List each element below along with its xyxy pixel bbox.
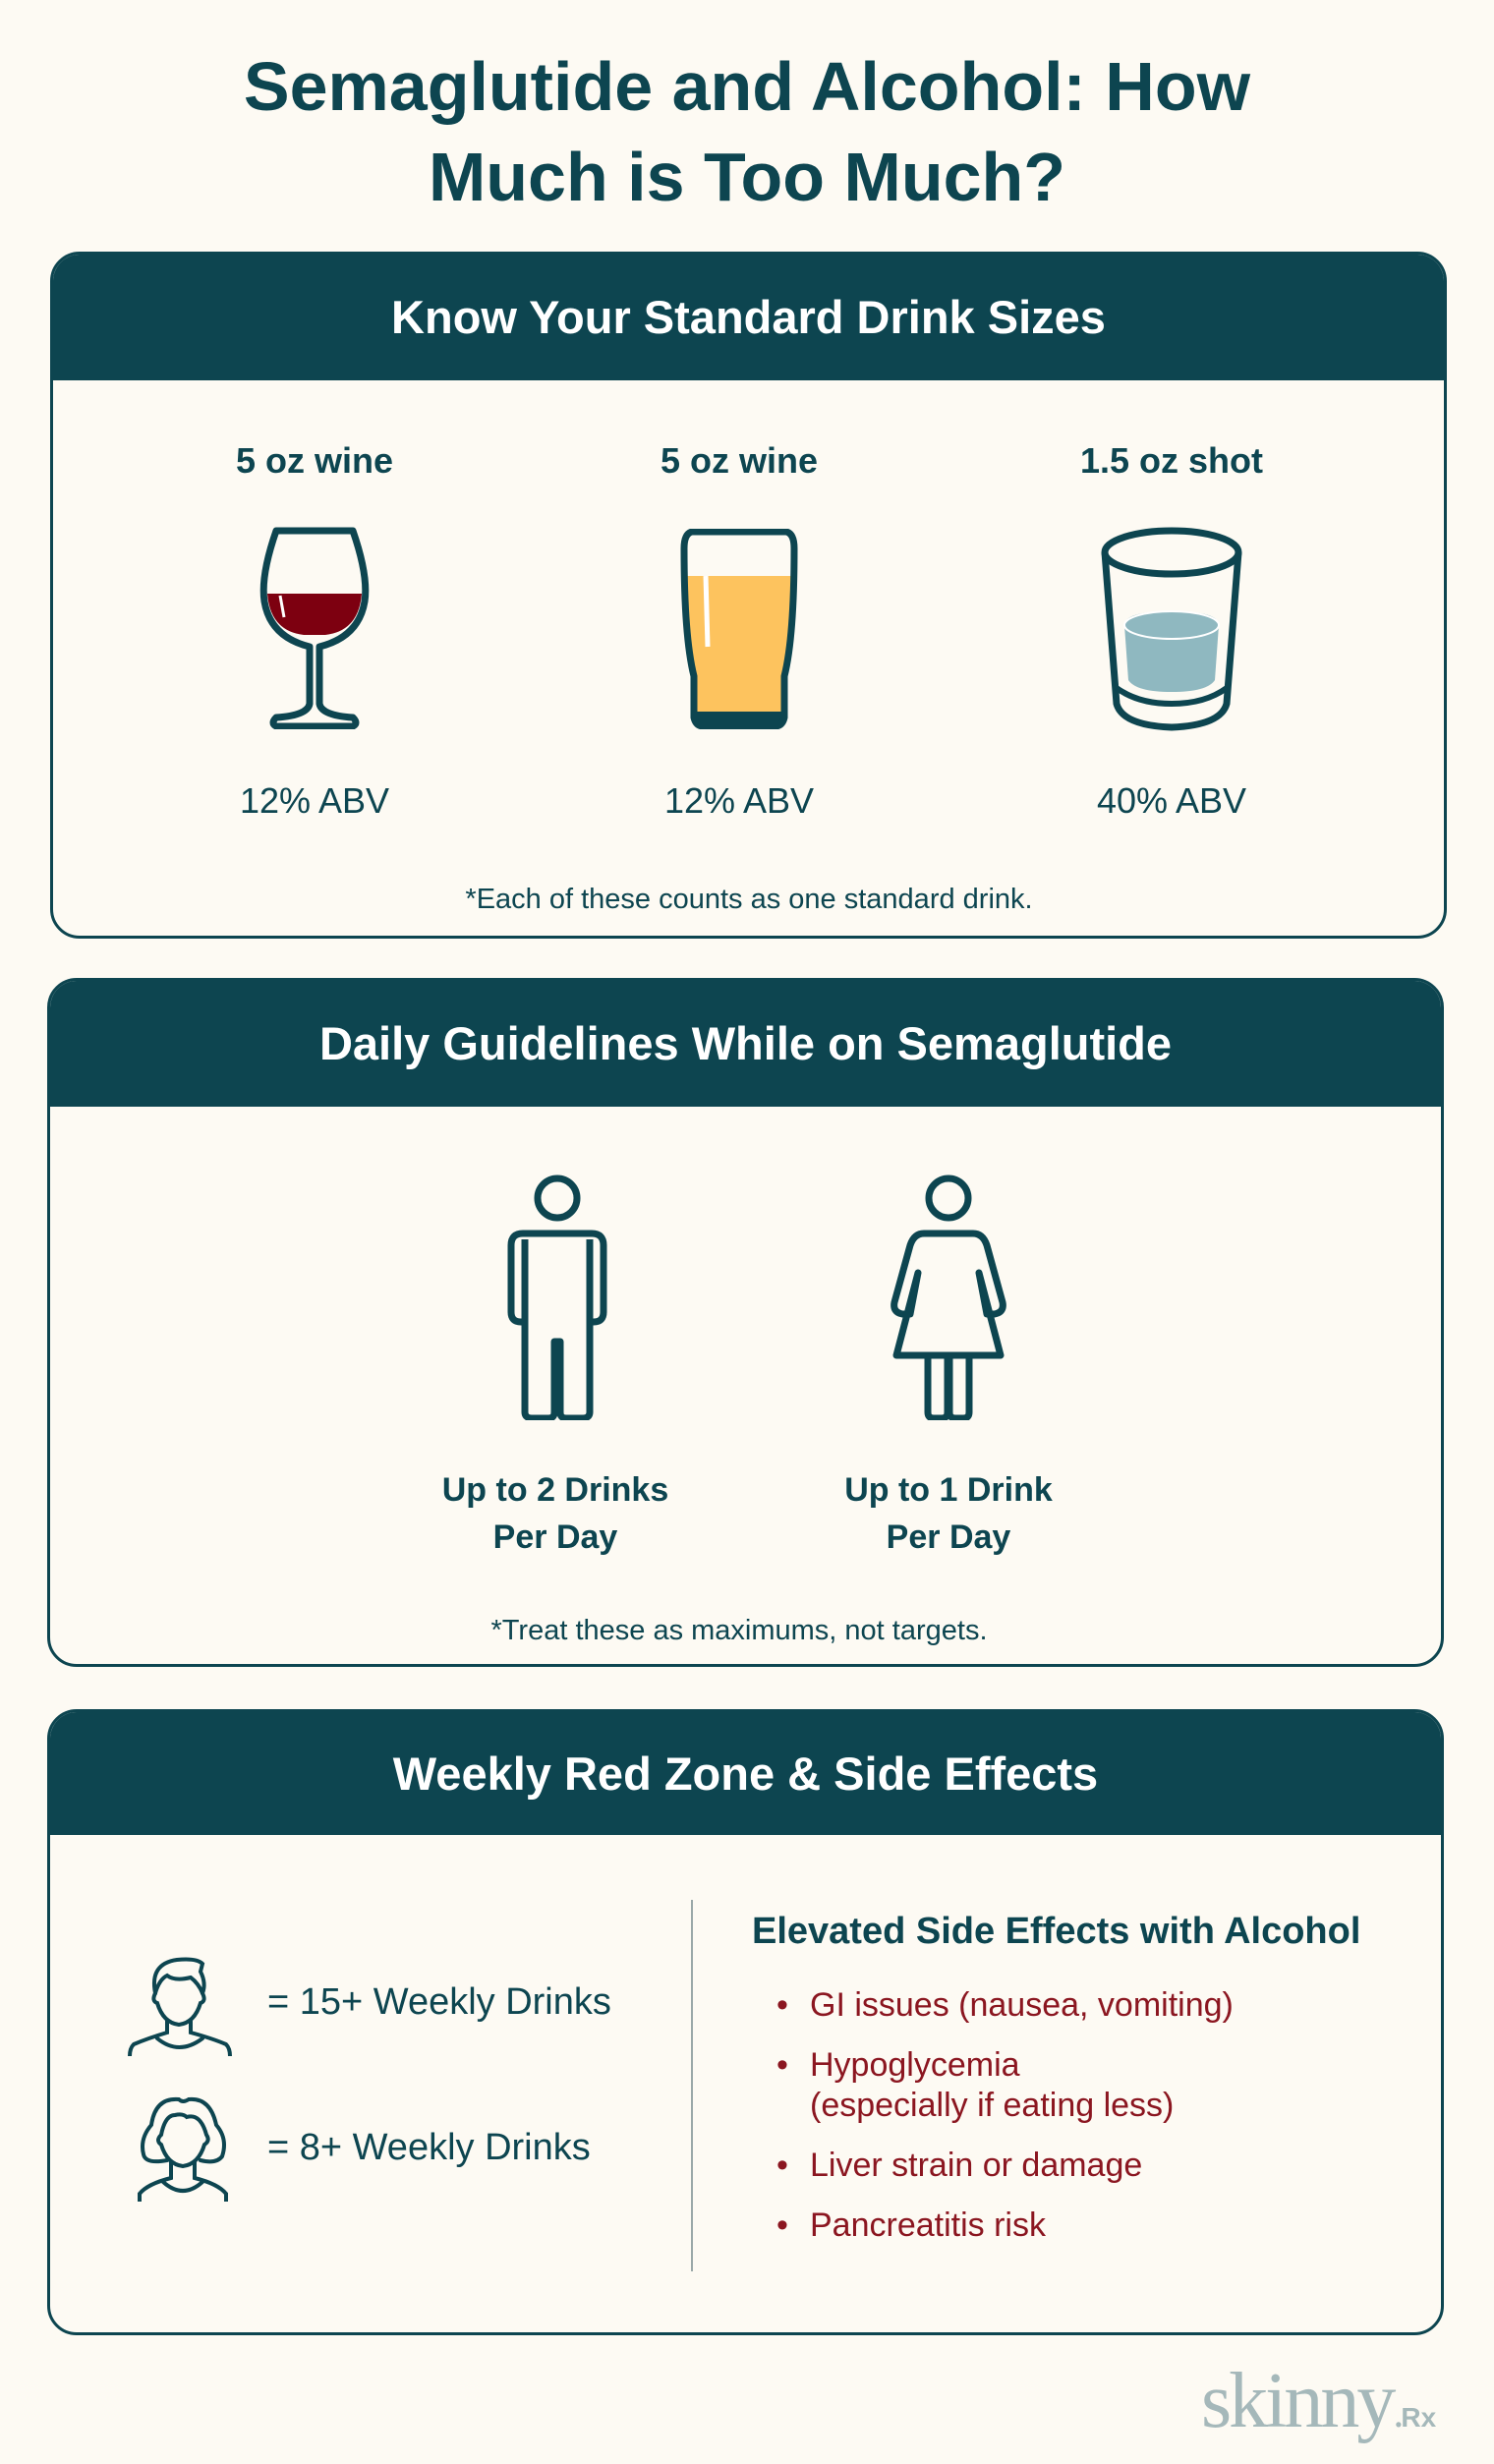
icon: woman avatar xyxy=(138,2097,228,2202)
header: standard drink sizes xyxy=(53,255,1444,380)
icon: wine glass xyxy=(259,527,370,729)
list: side effects: • xyxy=(776,1986,788,2024)
list: side effects: • xyxy=(776,2206,788,2244)
label: wine: 5 oz wine xyxy=(236,440,393,481)
panel: daily guidelines xyxy=(47,978,1444,1667)
list: side effects: • xyxy=(776,2046,788,2084)
text: ABV wine: 12% ABV xyxy=(240,780,389,821)
footnote: standard drink: *Each of these counts as one standard drink. xyxy=(465,884,1033,915)
icon: shot glass xyxy=(1101,527,1242,731)
list: side effects: (especially if eating less) xyxy=(810,2087,1174,2124)
header: daily guidelines xyxy=(50,981,1441,1107)
icon: man xyxy=(507,1175,607,1420)
header: daily guidelines: Daily Guidelines While on Semaglutide xyxy=(319,1017,1172,1069)
text: ABV shot: 40% ABV xyxy=(1097,780,1246,821)
text: women daily: Per Day xyxy=(887,1519,1010,1556)
icon: beer glass xyxy=(680,529,798,729)
label: shot: 1.5 oz shot xyxy=(1080,440,1263,481)
panel: weekly red zone xyxy=(47,1709,1444,2335)
heading: side effects: Elevated Side Effects with Alcohol xyxy=(752,1911,1360,1952)
text: women weekly: = 8+ Weekly Drinks xyxy=(267,2127,591,2168)
header: standard drink sizes: Know Your Standard Drink Sizes xyxy=(391,291,1106,343)
title: Much is Too Much? xyxy=(429,139,1065,215)
title: Semaglutide and Alcohol: How xyxy=(244,48,1250,125)
logo: skinny.Rx xyxy=(1201,2358,1436,2444)
list: side effects: Liver strain or damage xyxy=(810,2147,1142,2184)
text: men daily: Up to 2 Drinks xyxy=(442,1471,668,1509)
list: side effects xyxy=(776,1986,1234,2244)
icon: man avatar xyxy=(128,1958,232,2056)
text: men weekly: = 15+ Weekly Drinks xyxy=(267,1981,611,2023)
list: side effects: Hypoglycemia xyxy=(810,2046,1020,2084)
header: weekly red zone: Weekly Red Zone & Side Effects xyxy=(393,1748,1098,1800)
divider xyxy=(691,1900,693,2271)
list: side effects: Pancreatitis risk xyxy=(810,2206,1046,2244)
label: beer: 5 oz wine xyxy=(661,440,818,481)
text: ABV beer: 12% ABV xyxy=(664,780,814,821)
list: side effects: • xyxy=(776,2147,788,2184)
panel: standard drink sizes xyxy=(50,252,1447,939)
text: women daily: Up to 1 Drink xyxy=(844,1471,1053,1509)
header: weekly red zone xyxy=(50,1712,1441,1835)
title xyxy=(244,48,1250,215)
icon: woman xyxy=(891,1175,1006,1420)
text: men daily: Per Day xyxy=(493,1519,617,1556)
list: side effects: GI issues (nausea, vomiting) xyxy=(810,1986,1234,2024)
text: women daily xyxy=(844,1471,1053,1556)
text: men daily xyxy=(442,1471,668,1556)
footnote: maximums: *Treat these as maximums, not targets. xyxy=(490,1615,988,1646)
